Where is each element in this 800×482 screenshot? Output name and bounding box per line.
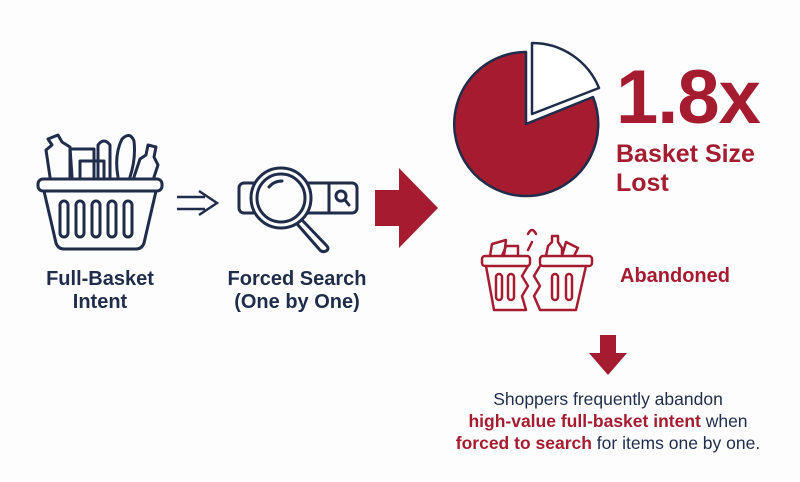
- label: Full-Basket Intent: [46, 268, 154, 313]
- text: summary statement: Shoppers frequently abandon: [493, 389, 723, 409]
- text: summary statement: forced to search for items one by one.: [456, 433, 760, 453]
- arrow: big red right arrow: [375, 168, 438, 248]
- text: summary statement: [456, 389, 760, 453]
- label: Forced Search (One by One): Forced Search: [228, 268, 366, 290]
- text: summary statement: high-value full-basket intent when: [468, 411, 748, 431]
- chart: pie with exploded slice: [453, 42, 600, 198]
- icon: search bar with magnifier: [238, 166, 358, 254]
- label: Full-Basket Intent: Intent: [73, 291, 127, 313]
- stat: 1.8x Basket Size Lost: [616, 55, 760, 197]
- label: Full-Basket Intent: Full-Basket: [46, 268, 154, 290]
- label: Forced Search (One by One): (One by One): [234, 291, 360, 313]
- stat: 1.8x Basket Size Lost: Lost: [616, 169, 669, 197]
- stat: 1.8x Basket Size Lost: Basket Size: [616, 140, 755, 168]
- icon: broken trash basket: [480, 228, 594, 312]
- arrow: double-line outline arrow: [177, 190, 220, 216]
- label: Abandoned: Abandoned: [620, 265, 730, 287]
- arrow: red down arrow: [589, 335, 627, 375]
- icon: full basket: [36, 134, 164, 250]
- stat: 1.8x Basket Size Lost: 1.8x: [616, 55, 760, 140]
- label: Forced Search (One by One): [228, 268, 366, 313]
